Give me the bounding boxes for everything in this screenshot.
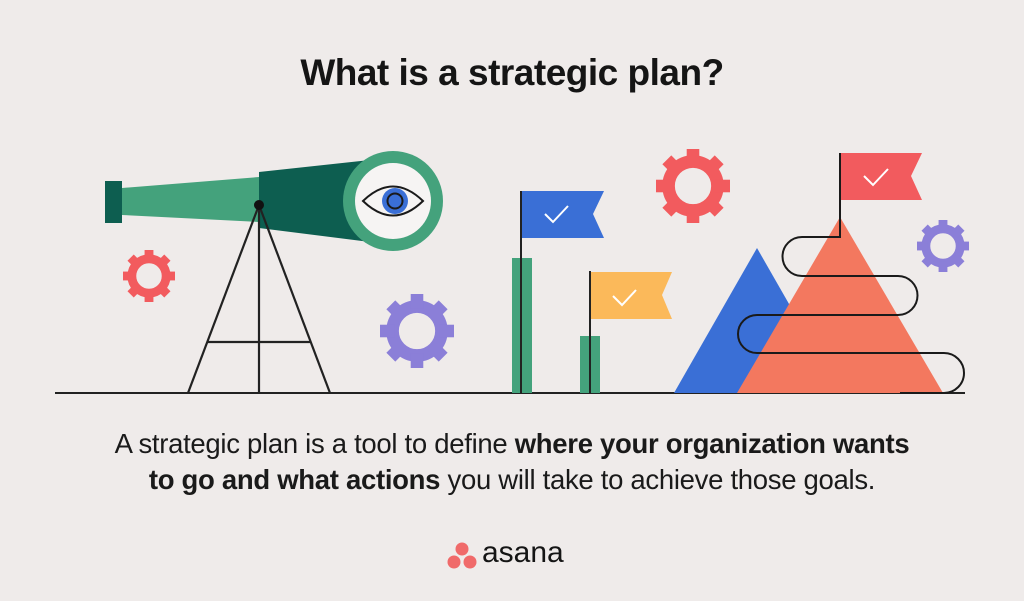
- gear: purple middle: [380, 294, 454, 368]
- gear: purple right: [917, 220, 969, 272]
- gear: red top: [656, 149, 730, 223]
- telescope: [105, 151, 443, 393]
- flag: blue: [512, 191, 604, 393]
- title: What is a strategic plan?: [300, 52, 724, 93]
- flag: yellow: [580, 271, 672, 393]
- mountains: [674, 153, 964, 393]
- body text: A strategic plan is a tool to define where your organization wants: [115, 428, 909, 459]
- illustration: [55, 149, 969, 394]
- logo: asana: asana: [482, 536, 564, 569]
- tripod: [188, 205, 330, 393]
- body text: [114, 428, 909, 495]
- body text: to go and what actions you will take to achieve those goals.: [149, 464, 875, 495]
- gear: red left: [123, 250, 175, 302]
- ground line: [55, 392, 965, 394]
